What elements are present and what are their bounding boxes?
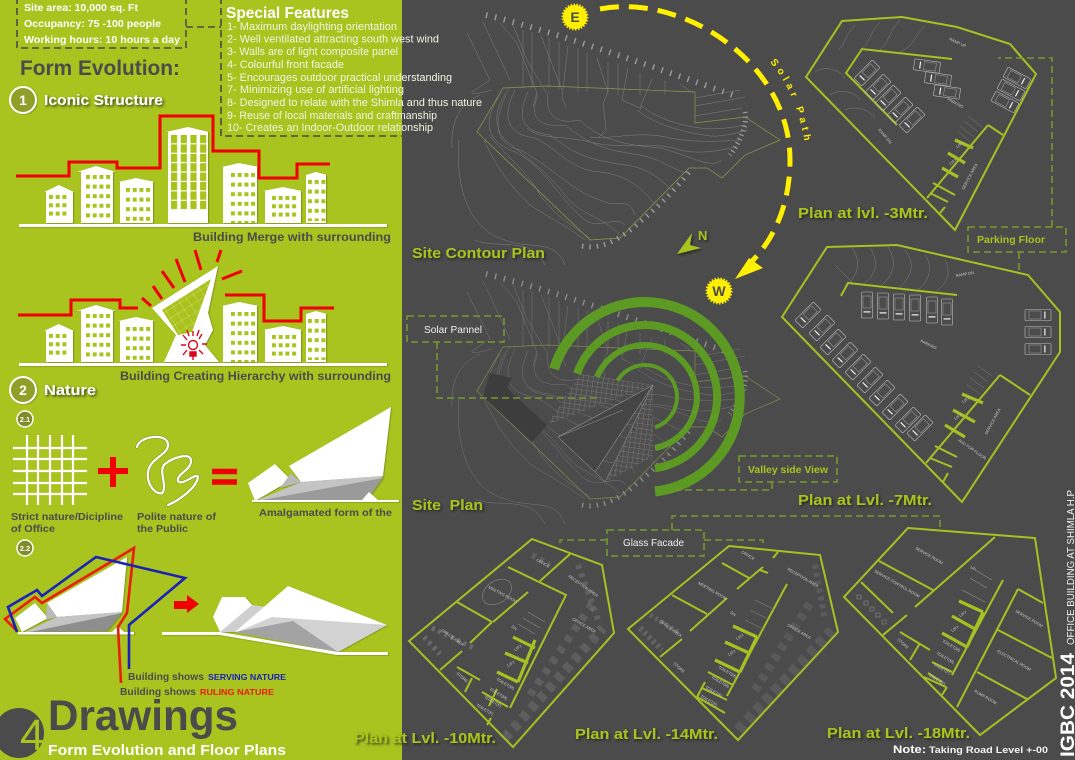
- red skyline outline 2 with rays: [18, 250, 334, 321]
- plan at level -14: [628, 546, 838, 740]
- plan at level -3: [806, 17, 1036, 230]
- plan at level -18: SERVICE ROOM: [914, 546, 944, 565]
- plan at level -10: LIFT: [506, 659, 516, 668]
- plan at level -14: OFFICE: [740, 550, 756, 561]
- site plan contours: [452, 274, 780, 524]
- solar path arc: [600, 7, 790, 265]
- plan at level -7: LIFT: [953, 412, 963, 421]
- callout: solar pannel: [407, 316, 600, 398]
- special features box: 1- Maximum daylighting orientation: [227, 21, 397, 33]
- section badge 1: iconic structure: 1: [19, 92, 27, 108]
- plan at level -18: LIFT: [958, 609, 968, 618]
- caption: plan -7: Plan at Lvl. -7Mtr.: [798, 493, 932, 509]
- special features box: 10- Creates an Indoor-Outdoor relationship: [227, 122, 433, 134]
- badge 2.1: 2.1: [20, 415, 30, 424]
- red arrow: [174, 595, 199, 613]
- captions: equation terms: [11, 507, 392, 535]
- caption: site contour plan: Site Contour Plan: [412, 245, 545, 262]
- badge 2.1: [17, 411, 33, 427]
- plan at level -14: DN: [729, 610, 737, 618]
- caption: building hierarchy: Building Creating Hierarchy with surrounding: [120, 371, 391, 383]
- title: drawings: Drawings: [48, 692, 238, 740]
- plan at level -10: LIFT: [513, 643, 523, 652]
- icon: red light bulb: [181, 330, 207, 360]
- plan at level -7: SERVICE AREA: [983, 407, 1002, 435]
- caption: plan -14: Plan at Lvl. -14Mtr.: [575, 727, 718, 743]
- connector between data box and features box: [186, 26, 221, 28]
- iconic tower: [166, 127, 209, 223]
- north arrow: [677, 228, 707, 254]
- vertical project title: [1058, 490, 1075, 757]
- plan at level -14: OFFICE AREA: [658, 619, 683, 638]
- plan at level -18: TOILET(M): [942, 639, 962, 653]
- plan at level -3: PARKING: [947, 96, 965, 109]
- special features box: 8- Designed to relate with the Shimla and thus nature: [227, 97, 482, 109]
- project data box: Working hours: 10 hours a day: [24, 34, 180, 46]
- plan at level -18: UP: [970, 565, 977, 572]
- solar panel concentric arcs: [554, 302, 740, 492]
- section badge 1: iconic structure: [10, 87, 163, 113]
- special features box: [221, 0, 482, 136]
- callout: valley side view: [677, 456, 837, 490]
- site plan building footprint: [483, 373, 653, 482]
- background: green form evolution panel: [0, 0, 402, 760]
- plan at level -10: TOILET(F): [484, 695, 503, 709]
- icon: red equals: [212, 472, 237, 482]
- legend: serving and ruling nature: [120, 671, 286, 698]
- plan at level -10: MEETING ROOM: [488, 584, 518, 604]
- caption: plan -18: Plan at Lvl. -18Mtr.: [827, 726, 970, 742]
- project data box: Occupancy: 75 -100 people: [24, 18, 161, 30]
- plan at level -10: TOILET(M): [488, 687, 509, 701]
- callout: glass facade: Glass Facade: [623, 537, 684, 549]
- legend: serving and ruling nature: SERVING NATURE: [208, 672, 286, 682]
- section number 4: 4: [20, 711, 44, 760]
- plan at level -10: OFFICE AREA: [572, 617, 597, 634]
- plan at level -14: LIFT: [735, 632, 745, 641]
- callout: glass facade: [560, 516, 940, 556]
- plan at level -10: TOILET(F): [476, 703, 495, 717]
- site contour plan drawing: [452, 15, 780, 265]
- section number 4: [0, 708, 44, 760]
- plan at level -14: STORE: [672, 661, 686, 674]
- plan at level -3: LIFT: [955, 140, 965, 149]
- icon: west sun: [706, 278, 732, 304]
- plan at level -14: TOILET(M): [718, 665, 738, 679]
- captions: equation terms: Polite nature of: [137, 511, 217, 523]
- caption: plan -10: Plan at Lvl. -10Mtr.: [354, 731, 496, 747]
- project data box: Site area: 10,000 sq. Ft: [24, 2, 138, 14]
- plan at level -18: SERVICE ROOM: [1014, 609, 1044, 628]
- plan at level -10: OFFICE AREA: [440, 628, 465, 647]
- arrowhead to west: [735, 258, 763, 279]
- plan at level -14: OFFICE AREA: [786, 623, 812, 640]
- plan at level -18: [844, 528, 1056, 735]
- special features box: 5- Encourages outdoor practical understanding: [227, 72, 452, 84]
- heading: form evolution: Form Evolution:: [20, 57, 180, 80]
- section badge 2: nature: 2: [19, 382, 27, 398]
- red skyline outline 1: [16, 116, 330, 178]
- note: road level: Taking Road Level +-00: [929, 745, 1048, 756]
- form with serving and ruling outlines: [5, 548, 185, 683]
- plan at level -14: TOILET(M): [710, 675, 731, 689]
- plan at level -18: TOILET(M): [936, 651, 956, 665]
- subtitle: Form Evolution and Floor Plans: [48, 742, 286, 759]
- caption: building merge: Building Merge with surrounding: [193, 232, 391, 244]
- captions: equation terms: Amalgamated form of the: [259, 507, 392, 519]
- callout: valley side view: Valley side View: [748, 464, 829, 476]
- plan at level -7: PARKING: [920, 338, 938, 350]
- plan at level -18: TOILET(F): [932, 662, 952, 676]
- caption: plan -3: Plan at lvl. -3Mtr.: [798, 206, 928, 222]
- caption: site plan: Site Plan: [412, 497, 483, 514]
- plan at level -14: TOILET(F): [700, 694, 719, 708]
- special features box: 3- Walls are of light composite panel: [227, 46, 398, 58]
- icon: red plus: [98, 457, 128, 487]
- plan at level -7: LIFT: [961, 395, 971, 404]
- skyline: surrounding buildings: [19, 163, 387, 227]
- callout: parking floor: [968, 58, 1066, 273]
- icon: west sun: W: [712, 283, 726, 299]
- plan at level -3: LIFT: [948, 157, 958, 166]
- plan at level -14: TOILET(F): [704, 685, 724, 699]
- special features box: 7- Minimizing use of artificial lighting: [227, 84, 404, 96]
- plan at level -10: DN: [510, 624, 518, 632]
- legend: serving and ruling nature: Building shows: [128, 671, 204, 683]
- project data box: [17, 0, 186, 48]
- note: road level: Note:: [893, 744, 926, 756]
- iconic angular building with grid: [152, 266, 219, 362]
- plan at level -18: ELECTRICAL ROOM: [996, 649, 1032, 672]
- badge 2.2: 2.2: [20, 544, 30, 553]
- plan at level -18: TOILET(F): [928, 673, 947, 687]
- solar path label: Solar Path: [771, 58, 811, 140]
- plan at level -18: LIFT: [950, 624, 960, 633]
- legend: serving and ruling nature: Building shows: [120, 686, 196, 698]
- resulting form drawing: [162, 586, 388, 655]
- icon: strict grid: [13, 435, 87, 505]
- plan at level -14: MEETING ROOM: [698, 581, 728, 601]
- plan at level -18: SERVICE CONTROL ROOM: [874, 569, 921, 599]
- plan at level -7: RAMP DN: [955, 270, 974, 278]
- plan at level -7: AHU FOR FLOOR: [957, 438, 987, 461]
- north arrow: N: [698, 228, 707, 243]
- special features box: 4- Colourful front facade: [227, 59, 344, 71]
- icon: east sun: E: [570, 9, 580, 25]
- section badge 2: nature: [10, 377, 96, 403]
- icon: east sun: [562, 4, 588, 30]
- section badge 1: iconic structure: Iconic Structure: [44, 92, 163, 109]
- plan at level -3: SERVICE AREA: [960, 162, 979, 190]
- plan at level -18: STORE: [896, 637, 910, 650]
- icon: organic squiggle: [137, 437, 198, 505]
- note: road level: [893, 744, 1048, 756]
- amalgamated form drawing: [248, 407, 399, 502]
- plan at level -14: LIFT: [727, 648, 737, 657]
- plan at level -3: RAMP UP: [949, 36, 967, 49]
- plan at level -18: PUMP ROOM: [974, 689, 998, 705]
- special features box: 9- Reuse of local materials and craftmanship: [227, 110, 437, 122]
- callout: parking floor: Parking Floor: [977, 234, 1045, 246]
- callout: solar pannel: Solar Pannel: [424, 324, 482, 336]
- captions: equation terms: of Office: [11, 523, 55, 535]
- badge 2.2: [17, 540, 33, 556]
- section badge 2: nature: Nature: [44, 382, 96, 399]
- captions: equation terms: Strict nature/Dicipline: [11, 511, 123, 523]
- special features box: Special Features: [226, 5, 349, 22]
- plan at level -3: RAMP DN: [877, 127, 893, 145]
- plan at level -10: TOILET(M): [496, 677, 516, 691]
- plan at level -14: RECEPTION AREA: [786, 567, 820, 589]
- plan at level -10: RECEPTION AREA: [567, 574, 599, 598]
- plan at level -10: [409, 539, 614, 747]
- captions: equation terms: the Public: [137, 523, 188, 535]
- plan at level -7: [782, 245, 1060, 502]
- plan at level -10: OFFICE: [536, 557, 551, 569]
- skyline copy: surrounding buildings in hierarchy scene: [19, 302, 387, 366]
- legend: serving and ruling nature: RULING NATURE: [200, 687, 274, 697]
- plan at level -10: STORE: [455, 671, 469, 684]
- special features box: 2- Well ventilated attracting south west wind: [227, 34, 439, 46]
